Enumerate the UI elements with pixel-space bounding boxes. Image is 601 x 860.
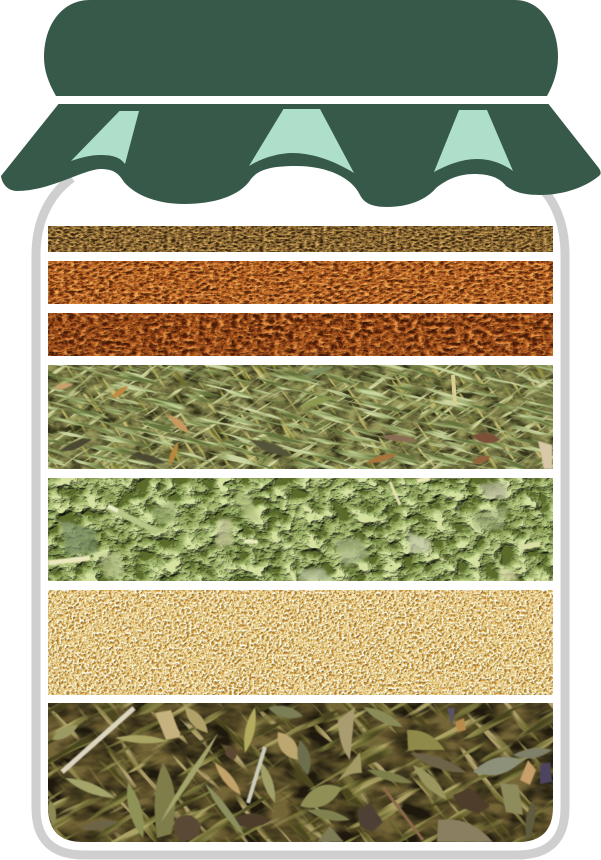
strip: red-brown ground spice	[48, 313, 553, 356]
jar lid	[44, 0, 558, 96]
strip: pale ground spice	[48, 590, 553, 695]
strip: ground brown spice	[48, 226, 553, 252]
strip: thyme leaves	[48, 365, 553, 469]
fold highlight: centre	[249, 109, 354, 173]
strip: dried herb leaves	[48, 703, 553, 842]
white stem	[62, 708, 134, 772]
fold highlight: left	[71, 111, 139, 164]
fabric cover	[1, 104, 601, 207]
strip: orange ground spice	[48, 261, 553, 304]
fold highlight: right	[434, 110, 513, 172]
jar outline	[36, 178, 565, 855]
strip: sage flakes	[48, 478, 553, 581]
